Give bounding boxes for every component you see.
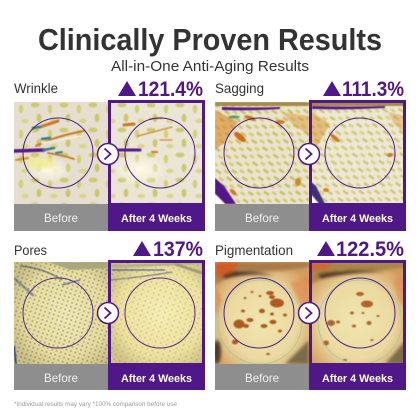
heading: sagging: Sagging bbox=[215, 80, 264, 96]
panel: pores bbox=[14, 238, 205, 390]
arrow: wrinkle bbox=[98, 144, 118, 164]
heading: wrinkle: Wrinkle bbox=[14, 80, 58, 96]
focus circles: pores bbox=[23, 278, 195, 348]
result: pores increase bbox=[133, 238, 203, 261]
result: wrinkle increase: 121.4% bbox=[138, 78, 203, 101]
arrow: sagging bbox=[298, 144, 320, 164]
before label: wrinkle bbox=[14, 204, 108, 231]
before photo: wrinkle bbox=[14, 102, 108, 204]
before label: pores: Before bbox=[44, 371, 78, 385]
panel: sagging bbox=[215, 78, 406, 231]
after label and frame: pores: After 4 Weeks bbox=[121, 373, 192, 385]
before label: wrinkle: Before bbox=[44, 211, 78, 225]
after label and frame: pores bbox=[108, 262, 205, 390]
arrow: pigmentation bbox=[298, 302, 320, 324]
focus circles: pigmentation bbox=[224, 278, 395, 348]
after label and frame: wrinkle: After 4 Weeks bbox=[121, 213, 192, 225]
result: sagging increase: 111.3% bbox=[342, 78, 404, 101]
after label and frame: sagging bbox=[309, 102, 406, 231]
before label: sagging: Before bbox=[245, 211, 279, 225]
focus circles: sagging bbox=[224, 118, 395, 188]
before label: pores bbox=[14, 364, 108, 390]
panel: wrinkle bbox=[14, 78, 205, 231]
before photo: sagging bbox=[215, 102, 309, 204]
after photo: wrinkle bbox=[108, 102, 205, 204]
after label and frame: sagging: After 4 Weeks bbox=[322, 213, 393, 225]
after label and frame: pigmentation bbox=[309, 262, 406, 390]
footnote: *Individual results may vary *100% comparison before use bbox=[14, 401, 177, 408]
after photo: pigmentation bbox=[309, 262, 406, 364]
focus circles: wrinkle bbox=[23, 118, 195, 188]
panel: pigmentation bbox=[213, 238, 406, 390]
result: pores increase: 137% bbox=[153, 238, 203, 261]
before label: pigmentation: Before bbox=[245, 371, 279, 385]
after label and frame: wrinkle bbox=[108, 102, 205, 231]
before photo: pigmentation bbox=[213, 262, 309, 364]
heading: pores: Pores bbox=[14, 242, 47, 258]
after label and frame: pigmentation: After 4 Weeks bbox=[322, 373, 393, 385]
subtitle: All-in-One Anti-Aging Results bbox=[111, 58, 309, 75]
before photo: pores bbox=[14, 262, 108, 364]
arrow: pores bbox=[98, 302, 118, 324]
before label: sagging bbox=[215, 204, 309, 231]
title: Clinically Proven Results bbox=[38, 22, 382, 57]
heading: pigmentation: Pigmentation bbox=[215, 242, 293, 258]
after photo: pores bbox=[108, 262, 205, 364]
before label: pigmentation bbox=[215, 364, 309, 390]
after photo: sagging bbox=[309, 102, 406, 204]
result: pigmentation increase: 122.5% bbox=[336, 238, 404, 261]
